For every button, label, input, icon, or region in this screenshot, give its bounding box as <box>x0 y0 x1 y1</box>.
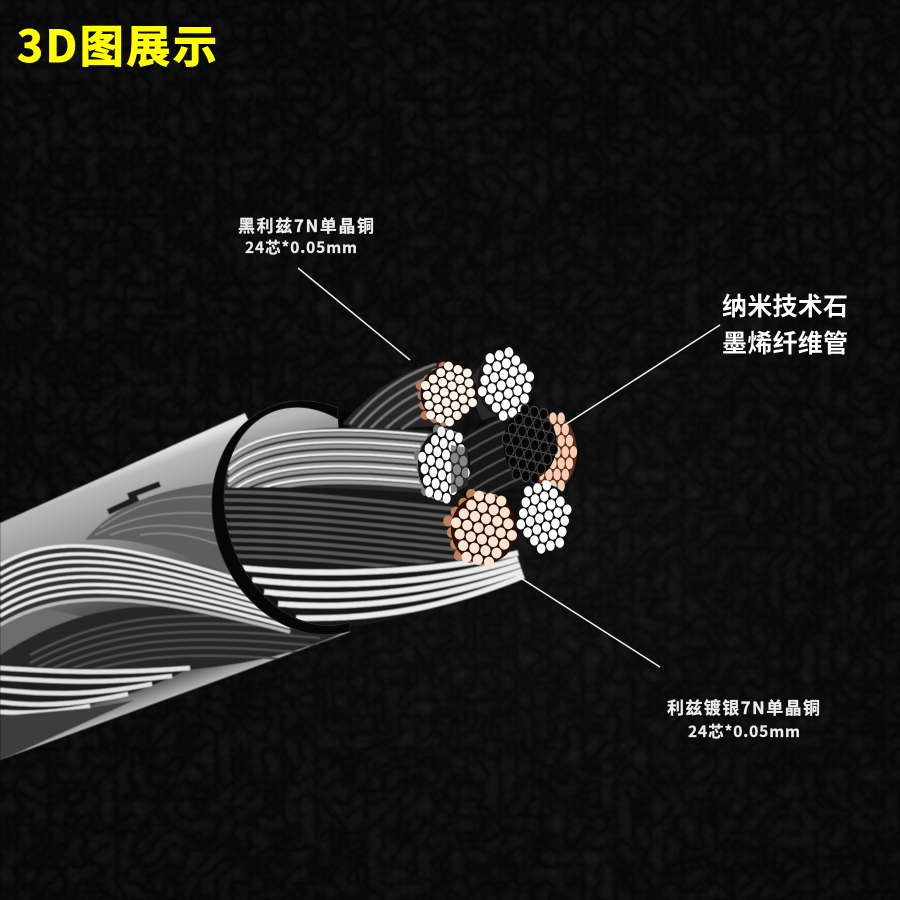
dark lower-left tube shade <box>0 700 135 760</box>
silver strand lower left <box>0 665 190 716</box>
rear silver bundle sides <box>465 360 515 420</box>
label: graphene fibre tube: 纳米技术石 <box>722 287 848 323</box>
silver strand bundle (upper middle) <box>224 428 460 510</box>
graphene fibre tube <box>497 400 563 488</box>
black ring at tube end <box>212 401 350 635</box>
rear copper face <box>405 354 487 435</box>
gray left strand <box>0 610 82 655</box>
label: black litz copper <box>238 212 374 258</box>
silver strand bundle (bottom) <box>238 545 526 632</box>
middle silver face <box>407 419 477 510</box>
leader line: graphene tube <box>563 325 720 426</box>
label: black litz copper: 黑利兹7N单晶铜 <box>238 212 374 237</box>
dark strand seen through the tube <box>0 606 344 670</box>
label: silver plated litz copper: 利兹镀银7N单晶铜 <box>667 694 820 719</box>
gray upper strand seen through the tube <box>85 480 230 574</box>
label: graphene fibre tube: 墨烯纤维管 <box>722 324 848 360</box>
silver twisted strand upper <box>0 546 290 632</box>
rear silver face <box>470 342 542 426</box>
leader line: black litz <box>298 268 410 360</box>
transparent tube with twisted strands inside <box>0 413 350 760</box>
rear bundle with copper face <box>342 362 456 460</box>
cross-sections of the conductor bundles <box>405 342 579 572</box>
copper ring behind the graphene tube <box>529 412 577 492</box>
lower silver face <box>509 475 579 559</box>
label: black litz copper: 24芯*0.05mm <box>245 236 357 258</box>
tube body <box>0 413 350 760</box>
label: silver plated litz copper: 24芯*0.05mm <box>688 720 800 742</box>
black graphene bundle <box>452 410 545 505</box>
dark strand bundle (lower middle) <box>222 487 490 574</box>
label: graphene fibre tube <box>722 287 848 360</box>
title: 3D图展示 <box>17 11 217 75</box>
lower copper face <box>436 484 524 572</box>
leader line: silver plated litz <box>516 575 660 667</box>
cable bundles leaving the tube <box>222 360 545 632</box>
ring interior of tube end <box>212 401 430 635</box>
label: silver plated litz copper <box>667 694 820 742</box>
